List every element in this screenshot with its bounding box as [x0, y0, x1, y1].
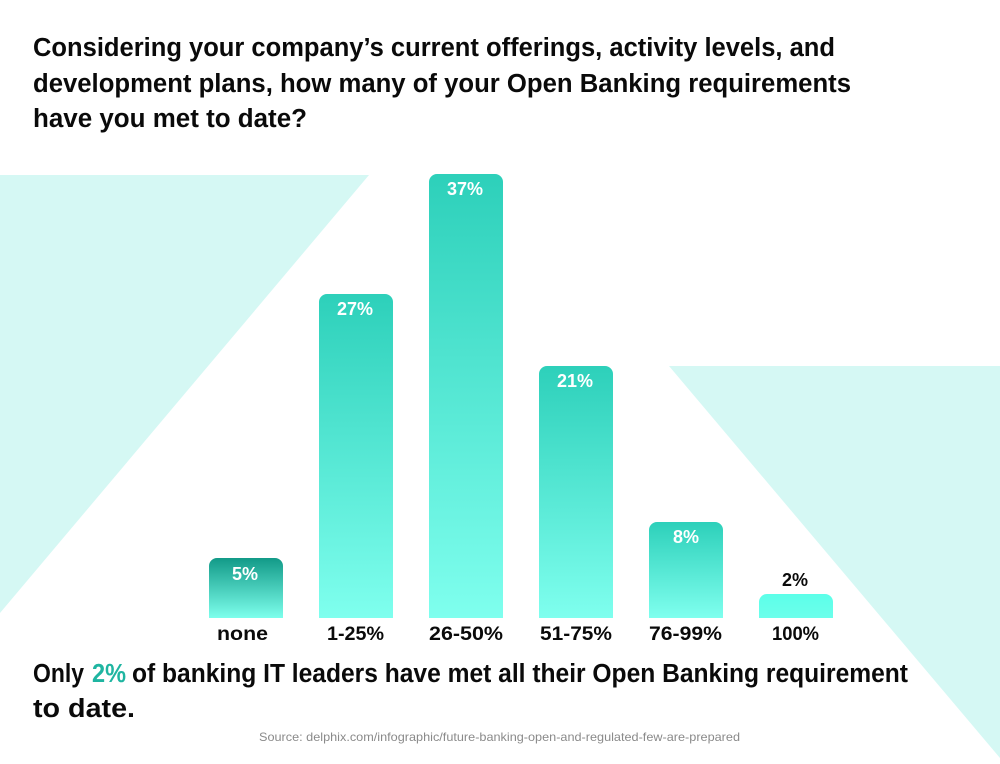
bar: 51-75% 21%: 51-75% — [540, 623, 612, 645]
bar: 51-75% 21% — [539, 366, 613, 645]
bar: 100% 2%: 100% — [772, 623, 819, 645]
bar: 1-25% 27% — [319, 294, 393, 645]
bar: none 5% — [209, 558, 283, 645]
takeaway text: 2% — [92, 660, 126, 688]
bar: 26-50% 37%: 26-50% — [429, 623, 503, 645]
takeaway text: of banking IT leaders have met all their Open Banking requirement — [132, 660, 908, 688]
title — [33, 34, 851, 133]
bar: 26-50% 37% — [429, 174, 503, 645]
title: Considering your company’s current offerings, activity levels, and — [33, 34, 835, 62]
bar: 1-25% 27%: 1-25% — [327, 623, 384, 645]
background triangle: right — [669, 366, 1000, 758]
bar: 100% 2%: 2% — [782, 570, 808, 590]
bar: 76-99% 8% — [649, 522, 723, 645]
source: Source: delphix.com/infographic/future-banking-open-and-regulated-few-are-prepared — [259, 730, 740, 744]
bar: none 5%: 5% — [232, 564, 258, 584]
bar chart — [209, 174, 833, 645]
title: have you met to date? — [33, 105, 307, 133]
takeaway text: to date. — [33, 695, 135, 723]
bar: 51-75% 21%: 21% — [557, 371, 593, 391]
bar: 100% 2% — [759, 570, 833, 645]
bar: none 5%: none — [217, 623, 268, 645]
takeaway text — [33, 660, 908, 723]
bar: 76-99% 8%: 76-99% — [649, 623, 722, 645]
bar: 26-50% 37%: 37% — [447, 179, 483, 199]
bar: 76-99% 8%: 8% — [673, 527, 699, 547]
background triangle: left — [0, 175, 369, 613]
title: development plans, how many of your Open Banking requirements — [33, 70, 851, 98]
takeaway text: Only — [33, 660, 85, 688]
bar: 1-25% 27%: 27% — [337, 299, 373, 319]
